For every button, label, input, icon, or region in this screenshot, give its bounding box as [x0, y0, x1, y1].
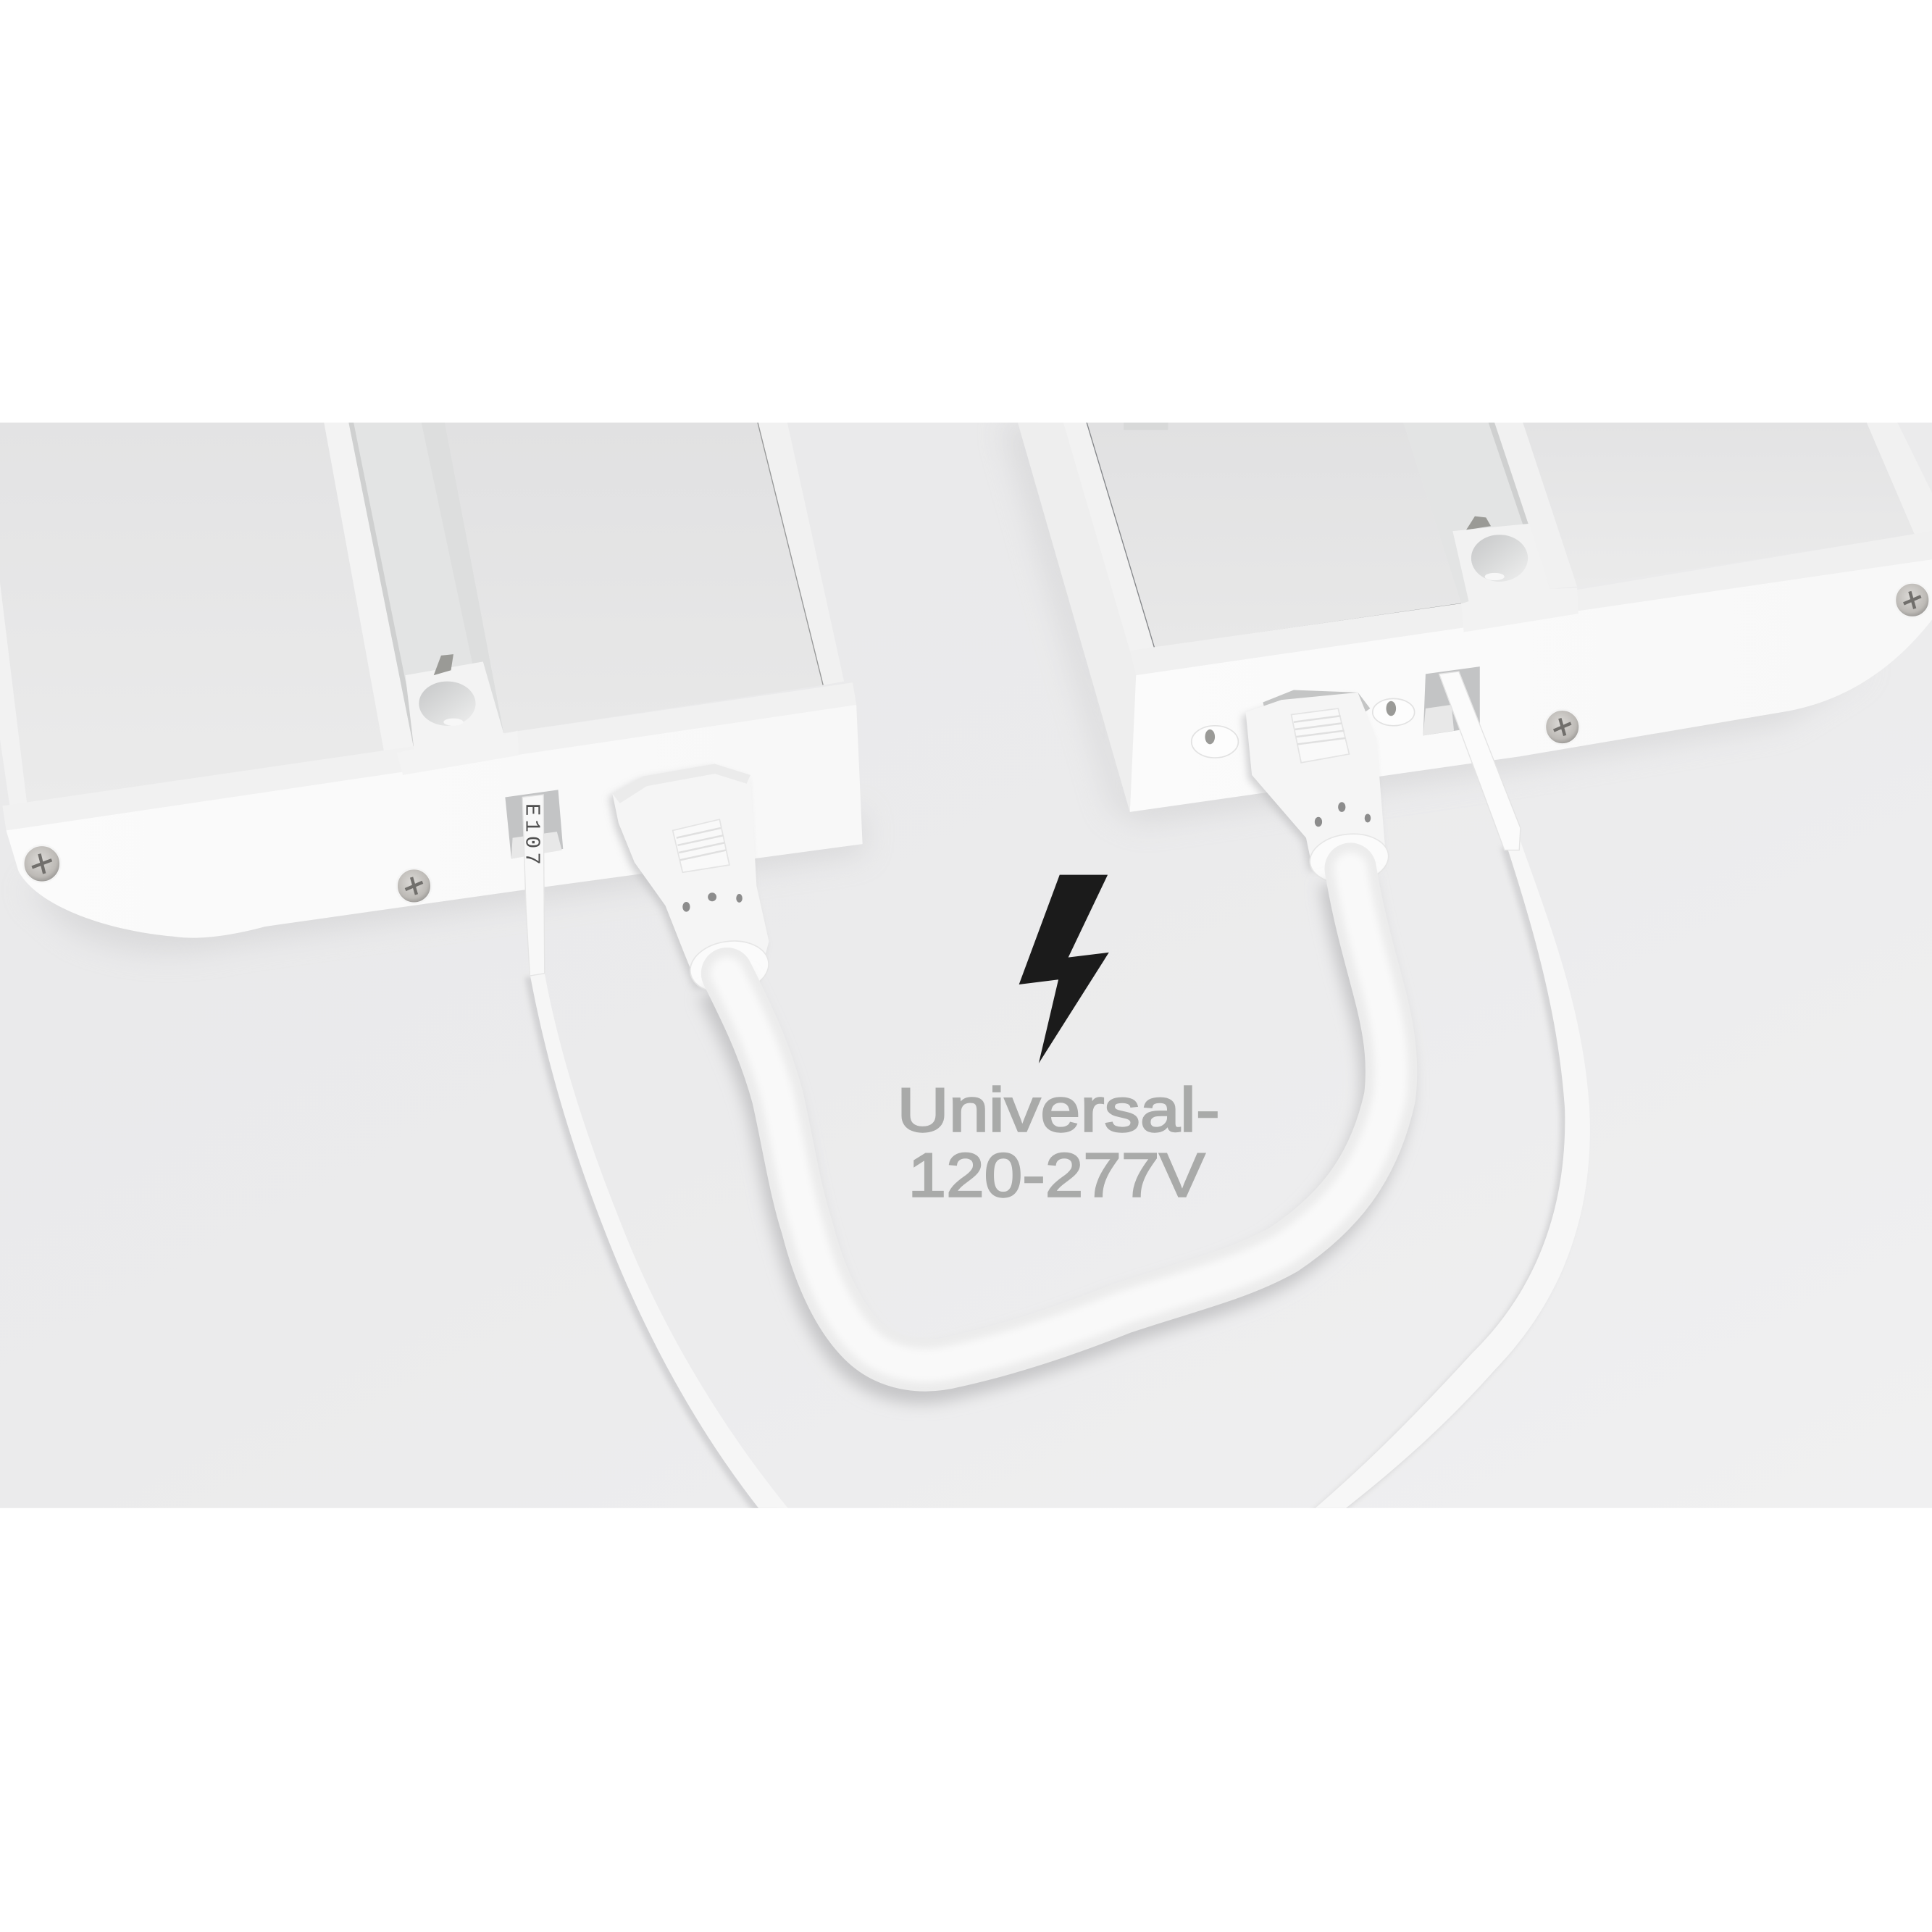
right screw 2 — [1545, 710, 1580, 744]
thin left wire — [519, 795, 796, 1522]
right rail — [1494, 422, 1577, 589]
left cover rail — [758, 422, 844, 685]
left lens panel — [0, 422, 385, 805]
left screw 2 — [397, 869, 431, 903]
left plug collar — [687, 936, 772, 998]
right plug vents — [1315, 817, 1322, 827]
left plug latch — [673, 819, 729, 872]
left screw 1 — [23, 845, 60, 882]
left mounting clip — [406, 654, 517, 746]
right plug collar — [1308, 830, 1391, 887]
right screw 1 — [1895, 583, 1930, 617]
infographic canvas — [0, 422, 1932, 1508]
right inner rail — [1063, 422, 1155, 651]
cover tab — [1124, 422, 1168, 430]
left outer rail — [0, 583, 27, 807]
label line 1: Universal- — [897, 1076, 1220, 1145]
right wire slot — [1423, 666, 1480, 735]
right lens panel — [1523, 422, 1915, 587]
label line 2: 120-277V — [908, 1142, 1205, 1210]
right mounting clip — [1452, 517, 1578, 632]
voltage label — [897, 1076, 1220, 1210]
left front face plate — [7, 705, 863, 938]
wire printing: E107 — [519, 803, 543, 869]
thick jumper cable — [722, 869, 1392, 1378]
left driver cover — [445, 423, 768, 467]
left top lip — [413, 734, 504, 749]
left light fixture — [0, 422, 863, 938]
left plug — [609, 764, 772, 998]
thin right wire — [1299, 672, 1590, 1523]
left plug vents — [682, 902, 690, 912]
right top lip — [1130, 531, 1932, 675]
right driver cover — [1087, 422, 1461, 648]
right plug — [1242, 690, 1391, 887]
photo surface background — [0, 422, 1932, 1508]
right channel — [1403, 422, 1550, 603]
left wire slot — [505, 790, 563, 859]
right outer side — [1018, 422, 1136, 812]
right far rail — [1867, 422, 1932, 535]
left channel — [348, 422, 504, 749]
right wire sleeve — [1439, 672, 1521, 850]
wire sleeve — [522, 795, 545, 976]
right light fixture — [1018, 422, 1932, 812]
left rail — [324, 422, 414, 754]
connector mount ears — [1192, 698, 1415, 758]
icon: lightning bolt — [1019, 875, 1109, 1063]
product photo band — [0, 422, 1932, 1523]
fixture shadows — [25, 422, 1873, 950]
right plug latch — [1292, 708, 1349, 763]
right front face plate — [1130, 559, 1932, 812]
